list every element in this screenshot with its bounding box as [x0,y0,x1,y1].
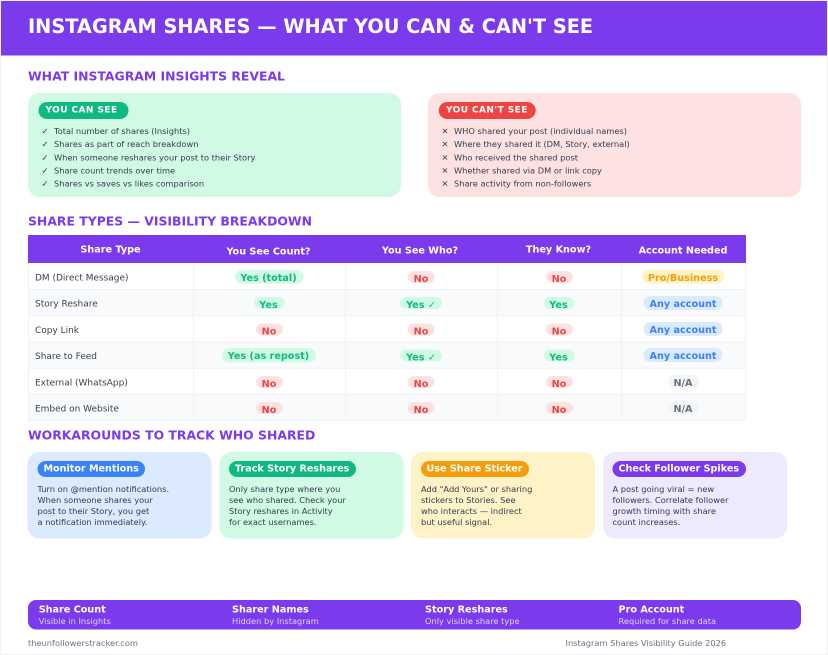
row: DM: No [552,274,567,285]
card: monitor mentions: Turn on @mention notifications. [36,484,169,494]
heading: workarounds: WORKAROUNDS TO TRACK WHO SHARED [28,428,315,442]
list: visible items: ✓ [42,152,48,162]
card: use share sticker: who interacts — indirect [421,506,523,516]
card: check follower spikes: growth timing with share [612,506,716,516]
row: Copy Link: Copy Link [35,326,80,336]
card: use share sticker: Use Share Sticker [426,463,523,474]
row: DM: DM (Direct Message) [35,274,129,284]
card: monitor mentions: Monitor Mentions [44,463,139,474]
badge: you can't see: YOU CAN'T SEE [445,106,528,116]
card: use share sticker [411,452,595,538]
row: Embed: No [552,405,567,416]
row: Share to Feed: Yes [548,352,568,364]
heading: insights: WHAT INSTAGRAM INSIGHTS REVEAL [28,68,285,84]
card: monitor mentions: When someone shares your [38,495,153,505]
list: visible items: Shares as part of reach breakdown [54,139,198,149]
card: monitor mentions: a notification immediately. [38,517,147,527]
heading: share types: SHARE TYPES — VISIBILITY BREAKDOWN [28,214,312,228]
row: Share to Feed [35,348,722,364]
table header: They Know? [526,245,591,256]
row: Embed [35,401,699,416]
table header [28,235,746,263]
list: visible items: ✓ [42,139,48,149]
card: monitor mentions [28,452,212,538]
row: Copy Link [35,322,722,338]
stat: share count: Visible in Insights [39,616,111,626]
card: track story reshares: Only share type where you [229,484,340,494]
row: External: External (WhatsApp) [35,378,128,388]
row: External: N/A [673,378,693,389]
row: Story Reshare: Story Reshare [35,300,98,310]
list: hidden items: Whether shared via DM or link copy [454,165,602,175]
panel: you can see [28,93,401,197]
row: Story Reshare: Yes [258,300,278,311]
list: visible items [42,126,255,188]
table header: You See Count? [225,246,311,257]
card: monitor mentions: post to their Story, you get [38,506,150,516]
row: External: No [552,379,567,390]
row: DM [35,270,724,285]
card: track story reshares: see who shared. Check your [229,495,346,505]
stat: share count [39,604,111,626]
row: External [35,375,699,390]
row: External: No [262,379,277,390]
card: check follower spikes: A post going viral = new [612,484,714,494]
row: Copy Link: No [262,326,277,338]
row: Copy Link: No [414,326,429,338]
stat: sharer names [232,604,319,626]
stat: pro account [618,604,716,626]
stat: pro account: Pro Account [618,604,685,616]
card: check follower spikes: followers. Correlate follower [612,495,729,505]
list: visible items: Share count trends over time [54,165,175,175]
row: External: No [414,379,429,390]
list: visible items: ✓ [42,178,48,188]
list: visible items: Total number of shares (Insights) [53,126,190,136]
stat: share count: Share Count [39,604,106,616]
title: INSTAGRAM SHARES — WHAT YOU CAN & CAN'T SEE [28,15,593,38]
card: check follower spikes: count increases. [612,517,680,527]
badge: you can't see [439,102,536,119]
row: Embed: N/A [673,404,693,415]
row: Share to Feed: Yes ✓ [405,352,436,364]
list: hidden items: ✕ [442,178,448,188]
header banner [1,1,827,56]
badge: you can see: YOU CAN SEE [44,106,118,116]
footer: site: theunfollowerstracker.com [28,638,138,648]
stat: story reshares [425,604,520,626]
badge: you can see [38,102,128,119]
stat: story reshares: Story Reshares [425,604,508,616]
list: hidden items: Where they shared it (DM, Story, external) [454,139,630,149]
list: visible items: Shares vs saves vs likes comparison [54,178,204,188]
row: Embed: No [262,405,277,416]
card: use share sticker: Add "Add Yours" or sharing [421,484,532,494]
row: Embed: No [414,405,429,416]
row: Share to Feed: Yes (as repost) [227,351,309,362]
list: hidden items: Share activity from non-followers [454,178,591,188]
row: Share to Feed: Share to Feed [35,352,97,362]
list: hidden items: ✕ [442,139,448,149]
row: Story Reshare: Yes [548,300,568,311]
row: Embed: Embed on Website [35,405,119,415]
card: use share sticker: stickers to Stories. See [421,495,516,505]
table header: You See Who? [381,246,458,257]
list: hidden items: ✕ [442,152,448,162]
table: share type visibility [28,235,746,421]
card: track story reshares: Track Story Reshares [235,463,350,474]
row: Story Reshare: Yes ✓ [405,300,436,311]
footer: guide title: Instagram Shares Visibility Guide 2026 [566,638,726,648]
row: Copy Link: No [552,326,567,338]
card: check follower spikes: Check Follower Spikes [618,463,739,474]
list: hidden items: WHO shared your post (individual names) [454,126,627,136]
list: visible items: ✓ [42,126,48,136]
stat: sharer names: Hidden by Instagram [232,616,319,626]
table header: Share Type [80,245,141,256]
row: DM: No [414,274,429,285]
list: hidden items: Who received the shared post [454,152,579,162]
panel: you can't see [428,93,801,197]
row: DM: Pro/Business [648,273,718,284]
stats bar [28,600,801,630]
stat: pro account: Required for share data [618,616,716,626]
card: track story reshares: for exact usernames. [229,517,317,527]
stat: sharer names: Sharer Names [232,604,309,616]
table header: Account Needed [639,246,728,257]
card: use share sticker: but useful signal. [421,517,492,527]
card: check follower spikes [603,452,787,538]
list: visible items: When someone reshares your post to their Story [54,152,255,162]
row: Story Reshare: Any account [650,299,717,310]
card: track story reshares [220,452,404,538]
row: Copy Link: Any account [650,325,717,336]
row: Story Reshare [35,296,722,311]
row: DM: Yes (total) [239,273,297,284]
card: track story reshares: Story reshares in Activity [229,506,333,516]
list: hidden items: ✕ [442,126,448,136]
list: hidden items: ✕ [442,165,448,175]
row: Share to Feed: Any account [650,351,717,362]
stat: story reshares: Only visible share type [425,616,520,626]
list: hidden items [442,126,630,188]
list: visible items: ✓ [42,165,48,175]
